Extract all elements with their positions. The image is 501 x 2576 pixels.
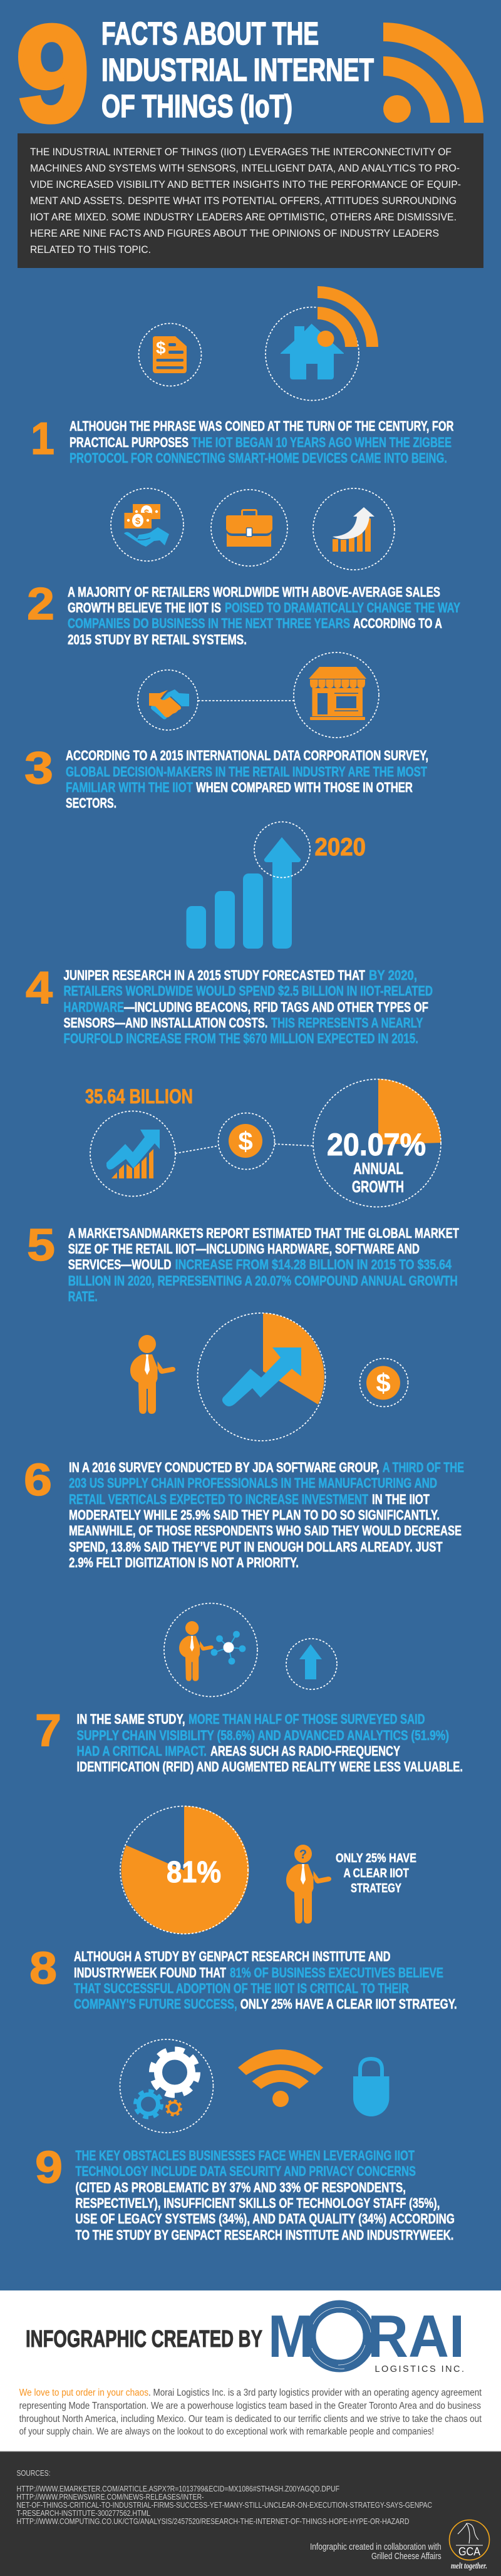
fact 1 bbox=[31, 414, 454, 466]
icon: businessman bbox=[130, 1335, 175, 1414]
about paragraph: We love to put order in your chaos bbox=[19, 2388, 148, 2398]
number 8: 8 bbox=[29, 1944, 57, 1994]
fact 7 text: MORE THAN HALF OF THOSE SURVEYED SAID bbox=[189, 1711, 425, 1727]
title: FACTS ABOUT THE bbox=[101, 16, 319, 51]
fact 9 text: (CITED AS PROBLEMATIC BY 37% AND 33% OF RESPONDENTS, bbox=[75, 2180, 406, 2195]
fact 5 bbox=[27, 1220, 459, 1304]
pie: 20.07% annual growth: ANNUAL bbox=[353, 1159, 403, 1178]
fact 2 text bbox=[68, 584, 460, 647]
big number 9: 9 bbox=[16, 0, 90, 150]
fact 3 text: FAMILIAR WITH THE IIOT bbox=[66, 780, 193, 795]
icon: invoice document in dotted circle bbox=[139, 323, 202, 386]
header bbox=[16, 0, 483, 150]
icon: briefcase bbox=[211, 490, 287, 566]
fact 2 text: ACCORDING TO A bbox=[353, 616, 442, 631]
icon: money in hand bbox=[111, 488, 183, 561]
diagram: investment pie with arrow bbox=[198, 1313, 326, 1441]
about paragraph bbox=[19, 2388, 482, 2437]
number 2: 2 bbox=[27, 579, 54, 629]
number 7: 7 bbox=[35, 1706, 61, 1756]
icon: money in hand: $ bbox=[135, 516, 141, 527]
sources list: HTTP://WWW.COMPUTING.CO.UK/CTG/ANALYSIS/2457520/RESEARCH-THE-INTERNET-OF-THINGS-HOPE-HYPE-OR-HAZARD bbox=[16, 2517, 410, 2526]
diagram: market growth to 35.64 billion bbox=[85, 1079, 441, 1207]
fact 1 text bbox=[70, 418, 454, 466]
number 6: 6 bbox=[24, 1455, 52, 1505]
number 3: 3 bbox=[24, 743, 53, 793]
label 2020: 2020 bbox=[314, 833, 366, 861]
chart: growth bars to 2020 bbox=[187, 822, 366, 949]
sources list bbox=[16, 2469, 432, 2526]
collaboration credit: Infographic created in collaboration with bbox=[310, 2542, 442, 2552]
icon: dollar coin: $ bbox=[376, 1368, 391, 1398]
collaboration credit: Grilled Cheese Affairs bbox=[371, 2552, 442, 2562]
intro panel: VIDE INCREASED VISIBILITY AND BETTER INSIGHTS INTO THE PERFORMANCE OF EQUIP- bbox=[30, 178, 461, 190]
icon: invoice document in dotted circle: $ bbox=[156, 338, 166, 358]
callout: only 25% have a clear IIOT strategy: STRATEGY bbox=[351, 1882, 401, 1895]
intro panel: IIOT ARE MIXED. SOME INDUSTRY LEADERS ARE OPTIMISTIC, OTHERS ARE DISMISSIVE. bbox=[30, 211, 457, 223]
icon: storefront bbox=[294, 652, 379, 738]
fact 5 text bbox=[68, 1225, 459, 1304]
logo: GCA: melt together. bbox=[451, 2562, 487, 2571]
fact 4 text bbox=[64, 967, 433, 1046]
fact 3 text: SECTORS. bbox=[66, 795, 116, 811]
logo: GCA bbox=[450, 2520, 490, 2571]
number 4: 4 bbox=[26, 963, 53, 1013]
icon: person with question mark head bbox=[286, 1845, 331, 1924]
icon: smart home with wifi signal bbox=[266, 286, 378, 401]
icon: up arrow bbox=[286, 1639, 337, 1689]
intro panel: MACHINES AND SYSTEMS WITH SENSORS, INTELLIGENT DATA, AND ANALYTICS TO PRO- bbox=[30, 162, 460, 174]
icon: dollar coin bbox=[218, 1113, 274, 1170]
fact 8 text: 81% OF BUSINESS EXECUTIVES BELIEVE bbox=[230, 1965, 443, 1981]
sources list: SOURCES: bbox=[16, 2469, 50, 2478]
icon: person with network bbox=[164, 1603, 257, 1697]
fact 6 text: A THIRD OF THE bbox=[383, 1460, 464, 1475]
icon: handshake linked to store bbox=[138, 652, 379, 738]
fact 4 text: HARDWARE bbox=[64, 999, 124, 1015]
title bbox=[101, 16, 374, 124]
fact 8 bbox=[29, 1944, 457, 2012]
title: OF THINGS (IoT) bbox=[101, 88, 292, 124]
sources list: HTTP://WWW.PRNEWSWIRE.COM/NEWS-RELEASES/INTER- bbox=[16, 2493, 204, 2501]
fact 7 text: HAD A CRITICAL IMPACT. bbox=[76, 1743, 207, 1759]
fact 9 text bbox=[75, 2148, 455, 2243]
fact 1 text: PRACTICAL PURPOSES bbox=[70, 435, 189, 450]
pie: 20.07% annual growth bbox=[313, 1079, 441, 1207]
number 5: 5 bbox=[27, 1220, 55, 1270]
fact 7 text bbox=[76, 1711, 463, 1775]
sources list: T-RESEARCH-INSTITUTE-300277562.HTML bbox=[16, 2509, 150, 2518]
logo: GCA: GCA bbox=[458, 2545, 480, 2558]
fact 4 text: JUNIPER RESEARCH IN A 2015 STUDY FORECASTED THAT bbox=[64, 967, 365, 983]
icon: dollar coin: $ bbox=[238, 1126, 253, 1156]
callout: only 25% have a clear IIOT strategy: ONLY 25% HAVE bbox=[336, 1852, 416, 1865]
sources list: NET-OF-THINGS-CRITICAL-TO-INDUSTRIAL-FIRMS-SUCCESS-YET-MANY-STILL-UNCLEAR-ON-EXECUTION-STRATEGY-SAYS-GENPAC bbox=[16, 2501, 432, 2510]
about paragraph: of your supply chain. We are always on the lookout to do exceptional work with remarkable people and companies! bbox=[19, 2426, 434, 2437]
pie chart: 81%: 81% bbox=[167, 1856, 221, 1889]
panel: created by Morai bbox=[0, 2290, 501, 2451]
pie: 20.07% annual growth: GROWTH bbox=[352, 1177, 404, 1196]
fact 2 text: COMPANIES DO BUSINESS IN THE NEXT THREE YEARS bbox=[68, 616, 350, 631]
fact 5 text: RATE. bbox=[68, 1289, 98, 1304]
fact 6 text bbox=[69, 1460, 464, 1570]
intro panel bbox=[18, 133, 483, 268]
callout: only 25% have a clear IIOT strategy: A CLEAR IIOT bbox=[343, 1867, 409, 1880]
collaboration credit bbox=[310, 2542, 442, 2562]
icon: RSS signal bbox=[383, 23, 483, 123]
fact 6 text: IN THE IIOT bbox=[372, 1492, 430, 1507]
number 9: 9 bbox=[35, 2143, 63, 2193]
fact 6 text: IN A 2016 SURVEY CONDUCTED BY JDA SOFTWARE GROUP, bbox=[69, 1460, 380, 1475]
fact 8 text: ALTHOUGH A STUDY BY GENPACT RESEARCH INSTITUTE AND bbox=[74, 1949, 391, 1964]
fact 6 text: RETAIL VERTICALS EXPECTED TO INCREASE INVESTMENT bbox=[69, 1492, 368, 1507]
pie: 20.07% annual growth: 20.07% bbox=[327, 1127, 426, 1162]
fact 2 bbox=[27, 579, 460, 647]
fact 2 text: GROWTH BELIEVE THE IIOT IS bbox=[68, 600, 221, 616]
icon: money in hand: $ bbox=[144, 508, 150, 518]
icon: rising bar chart with arrow bbox=[313, 488, 395, 570]
fact 7 text: AREAS SUCH AS RADIO-FREQUENCY bbox=[210, 1743, 400, 1759]
fact 3 text bbox=[66, 748, 428, 811]
fact 4 text: BY 2020, bbox=[369, 967, 417, 983]
title: INDUSTRIAL INTERNET bbox=[101, 52, 374, 88]
fact 8 text: INDUSTRYWEEK FOUND THAT bbox=[74, 1965, 226, 1981]
fact 8 text bbox=[74, 1949, 457, 2012]
icon: wifi bbox=[238, 2049, 323, 2107]
fact 4 bbox=[26, 963, 433, 1046]
logo: Morai Logistics: M bbox=[268, 2303, 313, 2370]
panel: sources bbox=[0, 2451, 501, 2576]
credit heading: INFOGRAPHIC CREATED BY bbox=[26, 2326, 262, 2352]
logo: Morai Logistics: RAI bbox=[368, 2303, 465, 2370]
fact 2 text: 2015 STUDY BY RETAIL SYSTEMS. bbox=[68, 632, 247, 647]
icon: growth chart bbox=[106, 1130, 160, 1178]
icon: gears bbox=[120, 2039, 213, 2133]
icon: dollar coin bbox=[359, 1359, 408, 1406]
intro panel: THE INDUSTRIAL INTERNET OF THINGS (IIOT) LEVERAGES THE INTERCONNECTIVITY OF bbox=[30, 146, 452, 158]
icon: padlock bbox=[353, 2059, 390, 2116]
fact 5 text: SERVICES—WOULD bbox=[68, 1257, 172, 1272]
fact 9 bbox=[35, 2143, 455, 2243]
fact 6 text: 2.9% FELT DIGITIZATION IS NOT A PRIORITY. bbox=[69, 1555, 299, 1570]
intro panel: MENT AND ASSETS. DESPITE WHAT ITS POTENTIAL OFFERS, ATTITUDES SURROUNDING bbox=[30, 195, 457, 207]
icon: person with question mark head: ? bbox=[299, 1848, 307, 1862]
fact 6 bbox=[24, 1455, 464, 1570]
fact 3 bbox=[24, 743, 428, 811]
fact 7 bbox=[35, 1706, 463, 1775]
fact 4 text: THIS REPRESENTS A NEARLY bbox=[271, 1015, 423, 1031]
logo: Morai Logistics bbox=[268, 2303, 465, 2374]
sources list: HTTP://WWW.EMARKETER.COM/ARTICLE.ASPX?R=1013799&ECID=MX1086#STHASH.Z00YAGQD.DPUF bbox=[16, 2485, 339, 2493]
intro panel: HERE ARE NINE FACTS AND FIGURES ABOUT THE OPINIONS OF INDUSTRY LEADERS bbox=[30, 227, 439, 239]
number 1: 1 bbox=[31, 414, 54, 464]
callout: only 25% have a clear IIOT strategy bbox=[336, 1852, 416, 1895]
fact 3 text: WHEN COMPARED WITH THOSE IN OTHER bbox=[196, 780, 413, 795]
pie chart: 81% bbox=[120, 1806, 249, 1934]
fact 8 text: COMPANY'S FUTURE SUCCESS, bbox=[74, 1996, 237, 2012]
label 35.64 billion: 35.64 BILLION bbox=[85, 1085, 193, 1108]
fact 7 text: IN THE SAME STUDY, bbox=[76, 1711, 185, 1727]
intro panel: RELATED TO THIS TOPIC. bbox=[30, 244, 151, 255]
fact 4 text: SENSORS—AND INSTALLATION COSTS. bbox=[64, 1015, 268, 1031]
logo: Morai Logistics: LOGISTICS INC. bbox=[374, 2364, 464, 2374]
